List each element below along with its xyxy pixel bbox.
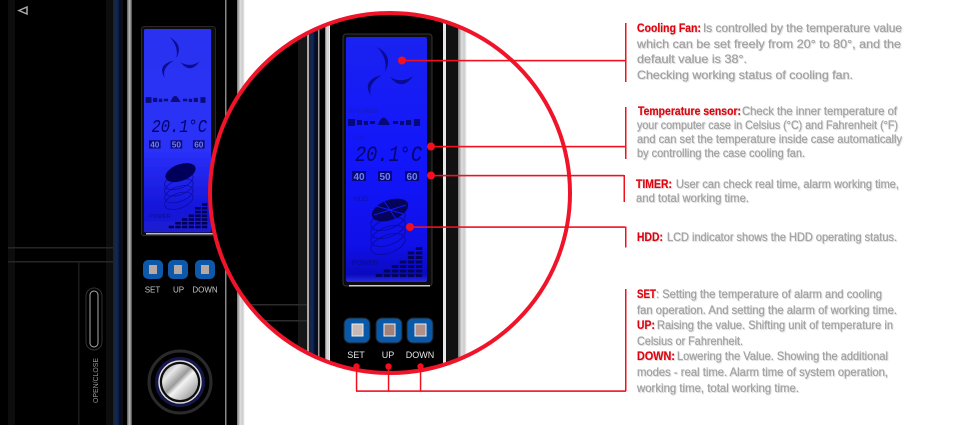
icon: HDD — [368, 194, 411, 259]
icon: fan — [368, 47, 413, 96]
LCD display (magnified) — [343, 34, 432, 286]
text: cooling fan: which can be set freely from 20° to 80°, and the — [636, 37, 901, 51]
callout: buttons — [353, 289, 626, 392]
text: set, up, down — [636, 287, 897, 395]
text: temperature sensor: your computer case in Celsius (°C) and Fahrenheit (°F) — [637, 118, 898, 132]
text: set, up, down: modes - real time. Alarm time of system operation, — [637, 365, 888, 379]
callout: temperature sensor — [427, 107, 626, 159]
power label: POWER — [352, 260, 378, 267]
text: cooling fan: Cooling Fan: — [637, 21, 701, 35]
LCD display (small): 60 — [194, 140, 204, 150]
buttons (magnified) — [344, 318, 433, 343]
LCD display (small): 50 — [172, 140, 181, 150]
LCD display (small): 20.1°C — [151, 118, 207, 138]
text: set, up, down: : Setting the temperature of alarm and cooling — [656, 287, 882, 301]
button labels (small): SET — [145, 286, 160, 294]
text: timer: User can check real time, alarm working time, — [676, 177, 899, 191]
text: temperature sensor: by controlling the case cooling fan. — [637, 146, 805, 160]
text: cooling fan: Is controlled by the temperature value — [703, 21, 902, 35]
text: set, up, down: Lowering the Value. Showing the additional — [677, 349, 888, 363]
power bars — [379, 246, 419, 277]
hdd label: HDD — [354, 196, 368, 203]
button labels (magnified): DOWN — [406, 350, 434, 360]
text: set, up, down: fan operation. And setting the alarm of working time. — [637, 303, 897, 317]
text: cooling fan: default value is 38°. — [637, 52, 747, 66]
callout: cooling fan — [398, 23, 626, 82]
text: set, up, down: DOWN: — [637, 349, 675, 363]
buttons (small) — [143, 260, 215, 279]
timer boxes: 40 — [354, 172, 365, 183]
speaker label: SPEAKER — [348, 108, 379, 115]
icon: speed bar — [348, 118, 420, 126]
text: temperature sensor: Check the inner temperature of — [742, 104, 898, 118]
callout: HDD — [406, 223, 626, 248]
button labels (magnified): SET — [347, 350, 365, 360]
text: set, up, down: working time, total working time. — [636, 381, 799, 395]
text: temperature sensor: Temperature sensor: — [638, 104, 741, 118]
text: timer — [636, 177, 899, 205]
timer boxes — [352, 171, 419, 183]
text: set, up, down: SET — [637, 287, 657, 301]
callout: timer — [427, 172, 625, 202]
text: timer: TIMER: — [636, 177, 672, 191]
button labels (magnified): UP — [382, 350, 394, 360]
text: set, up, down: Raising the value. Shifting unit of temperature in — [657, 318, 893, 332]
power button — [149, 351, 211, 413]
button labels (small) — [145, 286, 218, 294]
button labels (magnified) — [347, 350, 434, 360]
icon: triangle marker — [19, 7, 27, 14]
text: set, up, down: UP: — [637, 318, 655, 332]
text: HDD: HDD: — [637, 230, 663, 244]
button labels (small): DOWN — [192, 286, 218, 294]
text: timer: and total working time. — [636, 191, 749, 205]
temp label: TEM — [352, 136, 365, 142]
LCD display (small): POWER — [149, 214, 171, 220]
text: HDD: LCD indicator shows the HDD operating status. — [667, 230, 897, 244]
button labels (small): UP — [173, 286, 184, 294]
open/close label: OPEN/CLOSE — [91, 358, 100, 403]
text: temperature sensor — [637, 104, 902, 160]
LCD display (small) — [141, 27, 215, 236]
text: cooling fan: Checking working status of cooling fan. — [637, 68, 853, 82]
text: temperature sensor: and can set the temperature inside case automatically — [637, 132, 902, 146]
temperature reading: 20.1°C — [355, 143, 423, 168]
open/close slot — [86, 288, 102, 350]
magnifier lens — [208, 11, 572, 375]
text: cooling fan — [636, 21, 902, 82]
callout lines — [353, 23, 626, 392]
text: set, up, down: Celsius or Fahrenheit. — [637, 334, 743, 348]
LCD display (small): 40 — [150, 140, 160, 150]
timer boxes: 50 — [380, 172, 391, 183]
timer boxes: 60 — [406, 172, 418, 183]
photo: PC case front panel — [0, 0, 245, 425]
